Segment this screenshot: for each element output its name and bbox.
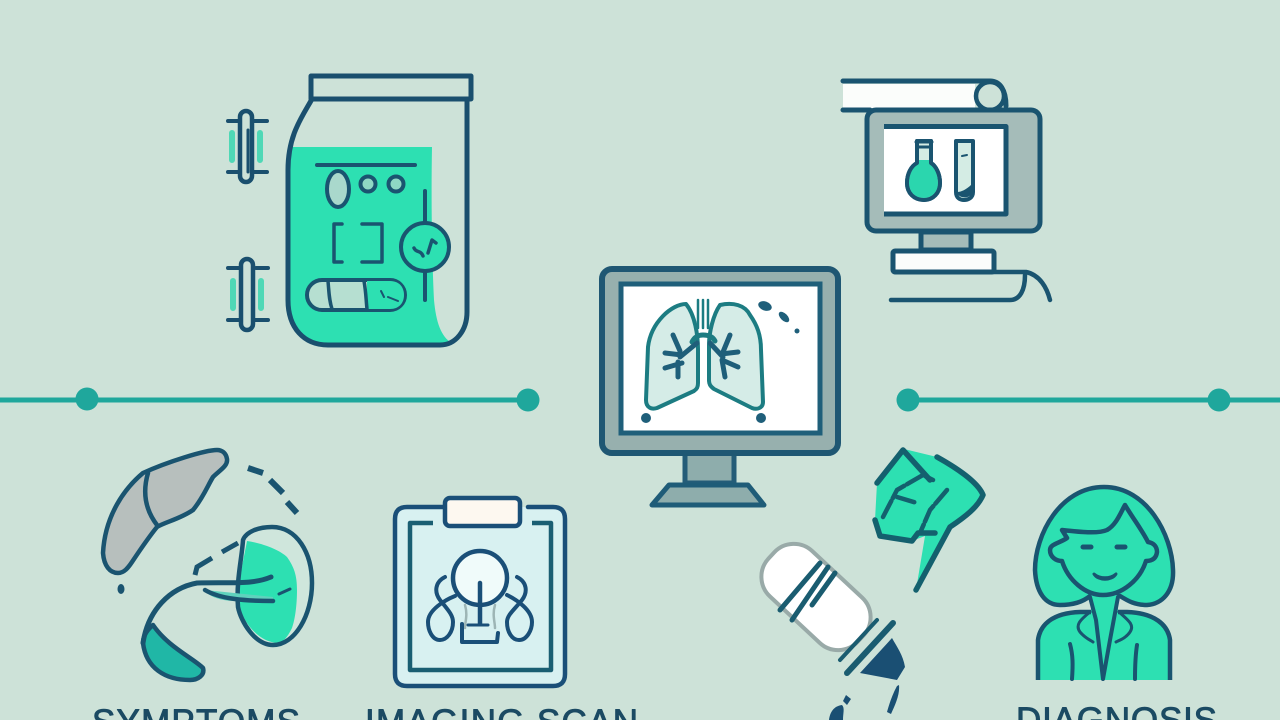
illustration: lungs (646, 300, 763, 409)
icon: lab monitor with flask and tube (843, 81, 1050, 300)
icon: side clip lower (228, 259, 268, 330)
icon: pill capsule with nozzle (750, 533, 905, 720)
icon: teal speech bubble (875, 449, 983, 590)
icon: imaging scan clipboard (395, 498, 565, 686)
timeline: right segment (896, 388, 1280, 412)
icon: central monitor with lungs (602, 269, 838, 505)
icon: specimen jar (288, 76, 471, 345)
icon: side clip upper (228, 111, 267, 182)
timeline: left segment (0, 388, 540, 412)
icon: doctor portrait (1035, 487, 1173, 680)
icon: liver and kidney organs (103, 450, 312, 680)
